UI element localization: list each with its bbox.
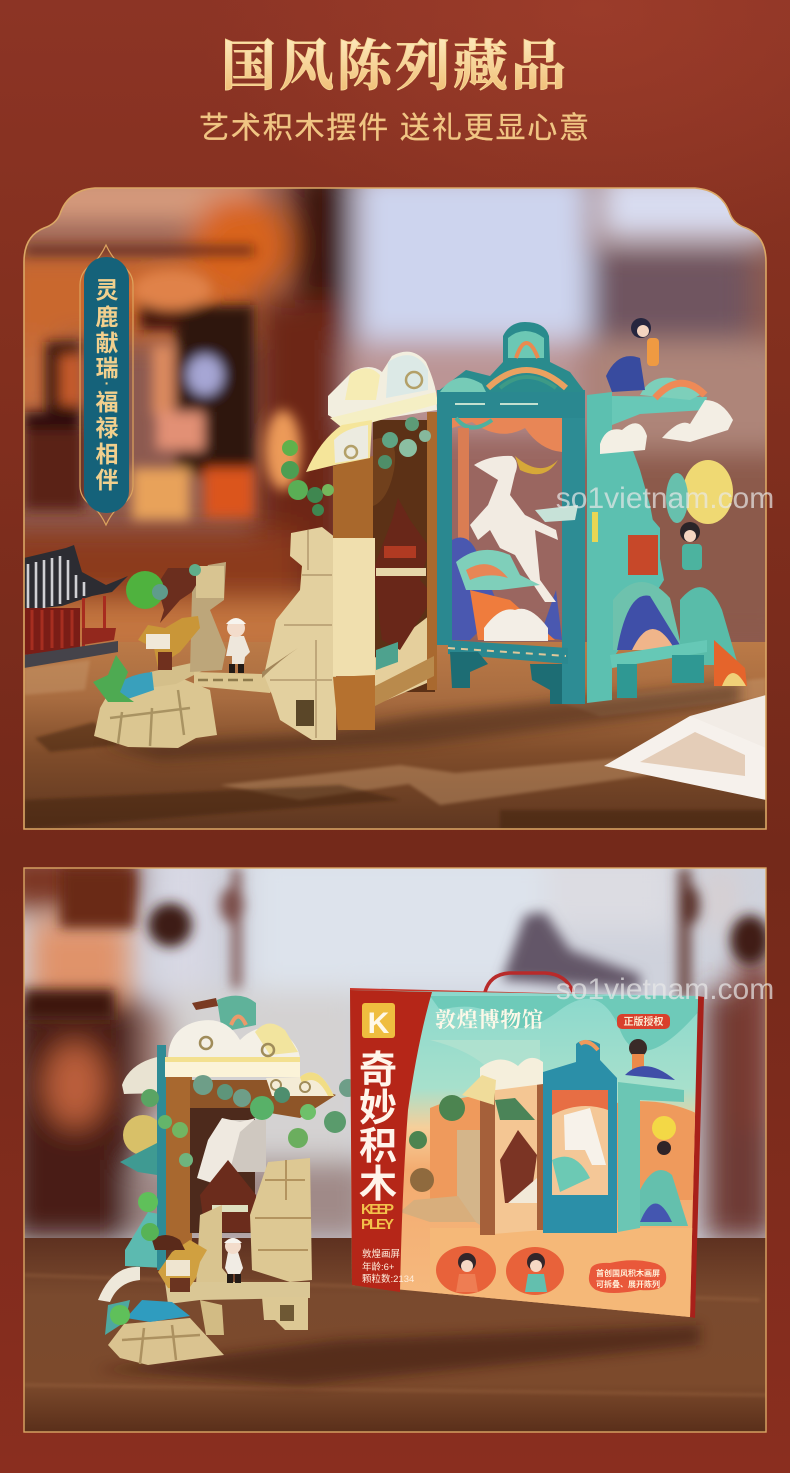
icon: folded screen model (120, 996, 336, 1290)
panel: boxed product photo (0, 850, 775, 1432)
callout: vertical label: 灵 (96, 277, 118, 303)
icon: right screen leaf (587, 356, 747, 703)
box handle (485, 973, 573, 992)
icon: green vines (281, 417, 431, 516)
box top lid (350, 988, 704, 1000)
box slogan: 首创国风积木画屏 (596, 1268, 660, 1278)
box art left leaf (400, 1058, 544, 1235)
brand K logo: K (368, 1007, 390, 1040)
box product name: 积 (359, 1126, 397, 1168)
icon: screen window scene (452, 418, 562, 641)
callout: vertical label: 鹿 (96, 304, 118, 330)
callout: vertical label: 瑞 (96, 355, 118, 381)
icon: left screen leaf (333, 412, 437, 730)
box red side panel (350, 990, 432, 1292)
box slogan (596, 1268, 660, 1289)
license badge: 正版授权 (624, 1015, 664, 1028)
callout: vertical label: 献 (96, 330, 118, 356)
box brand text: PLEY (361, 1216, 394, 1233)
callout: vertical label: 禄 (96, 415, 118, 441)
callout: vertical label: 福 (96, 389, 118, 415)
watermark: so1vietnam.com (556, 482, 774, 515)
panel border (24, 188, 766, 829)
box side strip (690, 996, 704, 1318)
box product specs: 敦煌画屏 (362, 1248, 400, 1260)
icon: figure (226, 618, 250, 673)
character badges (436, 1246, 496, 1294)
photo background (0, 170, 790, 829)
icon: product box (350, 973, 704, 1320)
icon: cream cloud top (306, 352, 438, 472)
watermark: so1vietnam.com (556, 973, 774, 1006)
icon: base rock with camel and figure (98, 1235, 310, 1365)
box art right leaf (618, 1082, 684, 1232)
brand K logo (362, 1003, 395, 1040)
icon: teal centre screen frame (437, 322, 585, 704)
box art scene (400, 996, 700, 1320)
box product name: 木 (359, 1164, 397, 1206)
box brand text (361, 1201, 394, 1233)
museum name: 敦煌博物馆 (435, 1008, 543, 1032)
box product name: 妙 (359, 1088, 397, 1130)
box product specs: 年龄:6+ (362, 1261, 395, 1273)
icon: hanging vines (110, 1075, 357, 1325)
box product specs (362, 1248, 414, 1285)
callout: vertical label: 相 (96, 441, 118, 467)
panel: folding screen photo (0, 170, 790, 829)
box product name (359, 1050, 397, 1206)
callout: vertical label: · (105, 375, 109, 391)
icon: bridge and beige wall (194, 527, 336, 740)
icon: fairy figures (631, 318, 702, 570)
photo background (0, 850, 775, 1432)
license badge (617, 1014, 670, 1029)
box art (350, 990, 698, 1317)
box art centre leaf (543, 1040, 617, 1233)
subtitle: 艺术积木摆件 送礼更显心意 (199, 112, 591, 145)
icon: temple model (24, 545, 128, 668)
icon: white deer (456, 456, 578, 602)
box slogan: 可拆叠、展开陈列 (596, 1279, 660, 1289)
icon: photo prints on table (604, 695, 766, 800)
box product specs: 颗粒数:2134 (362, 1273, 414, 1285)
icon: rock island with camel and figure (93, 562, 226, 748)
box brand text: KEEP (361, 1201, 394, 1218)
callout: vertical label: 伴 (96, 467, 118, 493)
title: 国风陈列藏品 (221, 36, 569, 97)
panel border (24, 868, 766, 1432)
callout: vertical label (80, 245, 133, 525)
box product name: 奇 (359, 1050, 397, 1092)
